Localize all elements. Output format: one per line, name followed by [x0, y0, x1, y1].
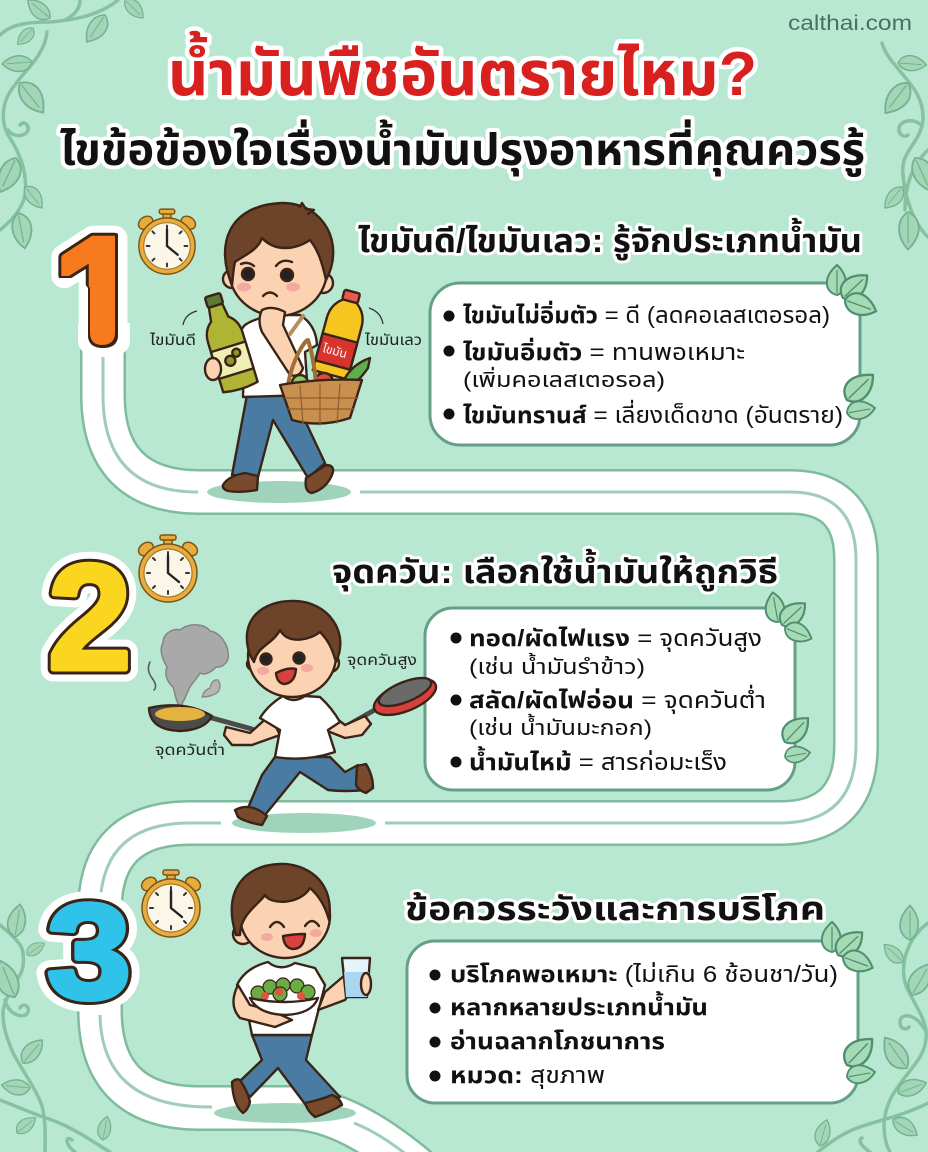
- step 1 label: bad fat: [364, 308, 422, 349]
- step 2 label: low smoke point: จุดควันต่ำ: [155, 739, 225, 759]
- head: [223, 203, 333, 316]
- vegetables: [342, 358, 370, 386]
- step 3 stopwatch: [139, 870, 203, 937]
- shoes: [232, 1079, 342, 1117]
- decoration: top-left vine: [0, 0, 148, 250]
- step 1 number: 1: [53, 204, 145, 389]
- step 2 label: high smoke point: จุดควันสูง: [347, 652, 417, 669]
- step 3 number: 3: [47, 876, 131, 1027]
- step 1 number: 1: [53, 204, 145, 389]
- list item: low heat: สลัด/ผัดไฟอ่อน = จุดควันต่ำ: [469, 684, 766, 714]
- step 1 label: bad fat: ไขมันเลว: [364, 332, 422, 349]
- shadow: [207, 481, 351, 503]
- arm and hand to chin: [260, 308, 303, 376]
- hand on olive bottle: [205, 358, 221, 380]
- step 2 heading: จุดควัน: เลือกใช้น้ำมันให้ถูกวิธี: [332, 548, 778, 592]
- decoration: top-right vine: [878, 43, 928, 250]
- list item: low heat: (เช่น น้ำมันมะกอก): [469, 713, 652, 740]
- legs: [238, 1035, 340, 1108]
- strap: [290, 316, 303, 334]
- cooking oil bottle: [313, 287, 370, 379]
- shirt: [237, 962, 325, 1035]
- panel 2 leaves: [763, 591, 815, 764]
- shirt: [238, 315, 317, 397]
- list item: read labels: อ่านฉลากโภชนาการ: [450, 1028, 665, 1054]
- decoration: bottom-left vine: [0, 903, 113, 1152]
- step 3 number: 3: [47, 876, 131, 1027]
- list item: saturated fat: [444, 337, 745, 392]
- list item: saturated fat: (เพิ่มคอเลสเตอรอล): [463, 366, 665, 392]
- step 1 heading: ไขมันดี/ไขมันเลว: รู้จักประเภทน้ำมัน: [358, 217, 862, 261]
- shadow: [214, 1103, 356, 1123]
- panel 3 leaves: [822, 922, 879, 1085]
- step 1 character with oil bottles and basket: [195, 203, 370, 503]
- website mark: calthai.com: [788, 12, 912, 35]
- list item: high heat: (เช่น น้ำมันรำข้าว): [469, 652, 645, 679]
- step 3 heading: ข้อควรระวังและการบริโภค: [405, 890, 825, 927]
- step 2 stopwatch: [136, 535, 200, 602]
- basket: [280, 380, 362, 424]
- step 1 label: good fat: ไขมันดี: [149, 332, 196, 349]
- subtitle: ไขข้อข้องใจเรื่องน้ำมันปรุงอาหารที่คุณควรรู้: [60, 119, 865, 177]
- list item: trans fat: ไขมันทรานส์ = เลี่ยงเด็ดขาด (อันตราย): [463, 399, 843, 428]
- list item: category: หมวด: สุขภาพ: [450, 1062, 605, 1089]
- panel: step 1 bullets: [430, 265, 880, 445]
- smoke: [161, 625, 228, 707]
- panel: step 3 bullets: [407, 922, 879, 1103]
- list item: high heat: [450, 625, 762, 679]
- shoes: [235, 764, 373, 825]
- list item: variety of oils: หลากหลายประเภทน้ำมัน: [450, 991, 708, 1020]
- step 2 number: 2: [48, 533, 131, 701]
- winding road: [100, 330, 856, 1152]
- left arm: [233, 985, 292, 1027]
- step 3 character with salad and water: [214, 864, 371, 1123]
- title: น้ำมันพืชอันตรายไหม?: [168, 30, 757, 109]
- step 1 number: [51, 226, 130, 357]
- shoes: [223, 465, 333, 493]
- list item: moderate amount: บริโภคพอเหมาะ (ไม่เกิน 6 ช้อนชา/วัน): [450, 961, 838, 987]
- steam: [148, 662, 156, 690]
- right pan: [343, 672, 441, 728]
- list item: unsaturated fat: ไขมันไม่อิ่มตัว = ดี (ลดคอเลสเตอรอล): [463, 300, 830, 328]
- small smoke puff: [202, 680, 220, 697]
- step 1 label: good fat: [149, 311, 197, 349]
- arms: [224, 715, 280, 745]
- panel 1 leaves: [827, 265, 880, 421]
- olive oil bottle: [195, 290, 258, 394]
- list item: burnt oil: น้ำมันไหม้ = สารก่อมะเร็ง: [469, 746, 727, 775]
- legs: [248, 757, 365, 815]
- list item: saturated fat: ไขมันอิ่มตัว = ทานพอเหมาะ: [463, 337, 745, 365]
- head: [232, 864, 330, 958]
- shirt: [260, 696, 340, 759]
- decoration: bottom-right vine: [812, 906, 928, 1152]
- list item: low heat: [450, 684, 766, 740]
- list item: high heat: ทอด/ผัดไฟแรง = จุดควันสูง: [469, 625, 762, 653]
- shadow: [232, 813, 376, 833]
- water glass: [342, 958, 371, 997]
- head: [247, 601, 340, 697]
- step 1 stopwatch: [136, 209, 198, 274]
- cooking oil bottle: ไขมัน: [320, 341, 349, 361]
- step 3 number: 3: [47, 876, 131, 1027]
- step 2 character with frying pans: [148, 601, 441, 833]
- right arm: [318, 975, 355, 1010]
- step 1 number: 1: [53, 204, 145, 389]
- legs: [232, 395, 325, 478]
- step 2 number: 2: [48, 533, 131, 701]
- basket handle: [288, 340, 317, 392]
- panel: step 2 bullets: [425, 591, 815, 790]
- salad bowl: [250, 978, 318, 1015]
- step 2 number: 2: [48, 533, 131, 701]
- left pan: [149, 705, 252, 731]
